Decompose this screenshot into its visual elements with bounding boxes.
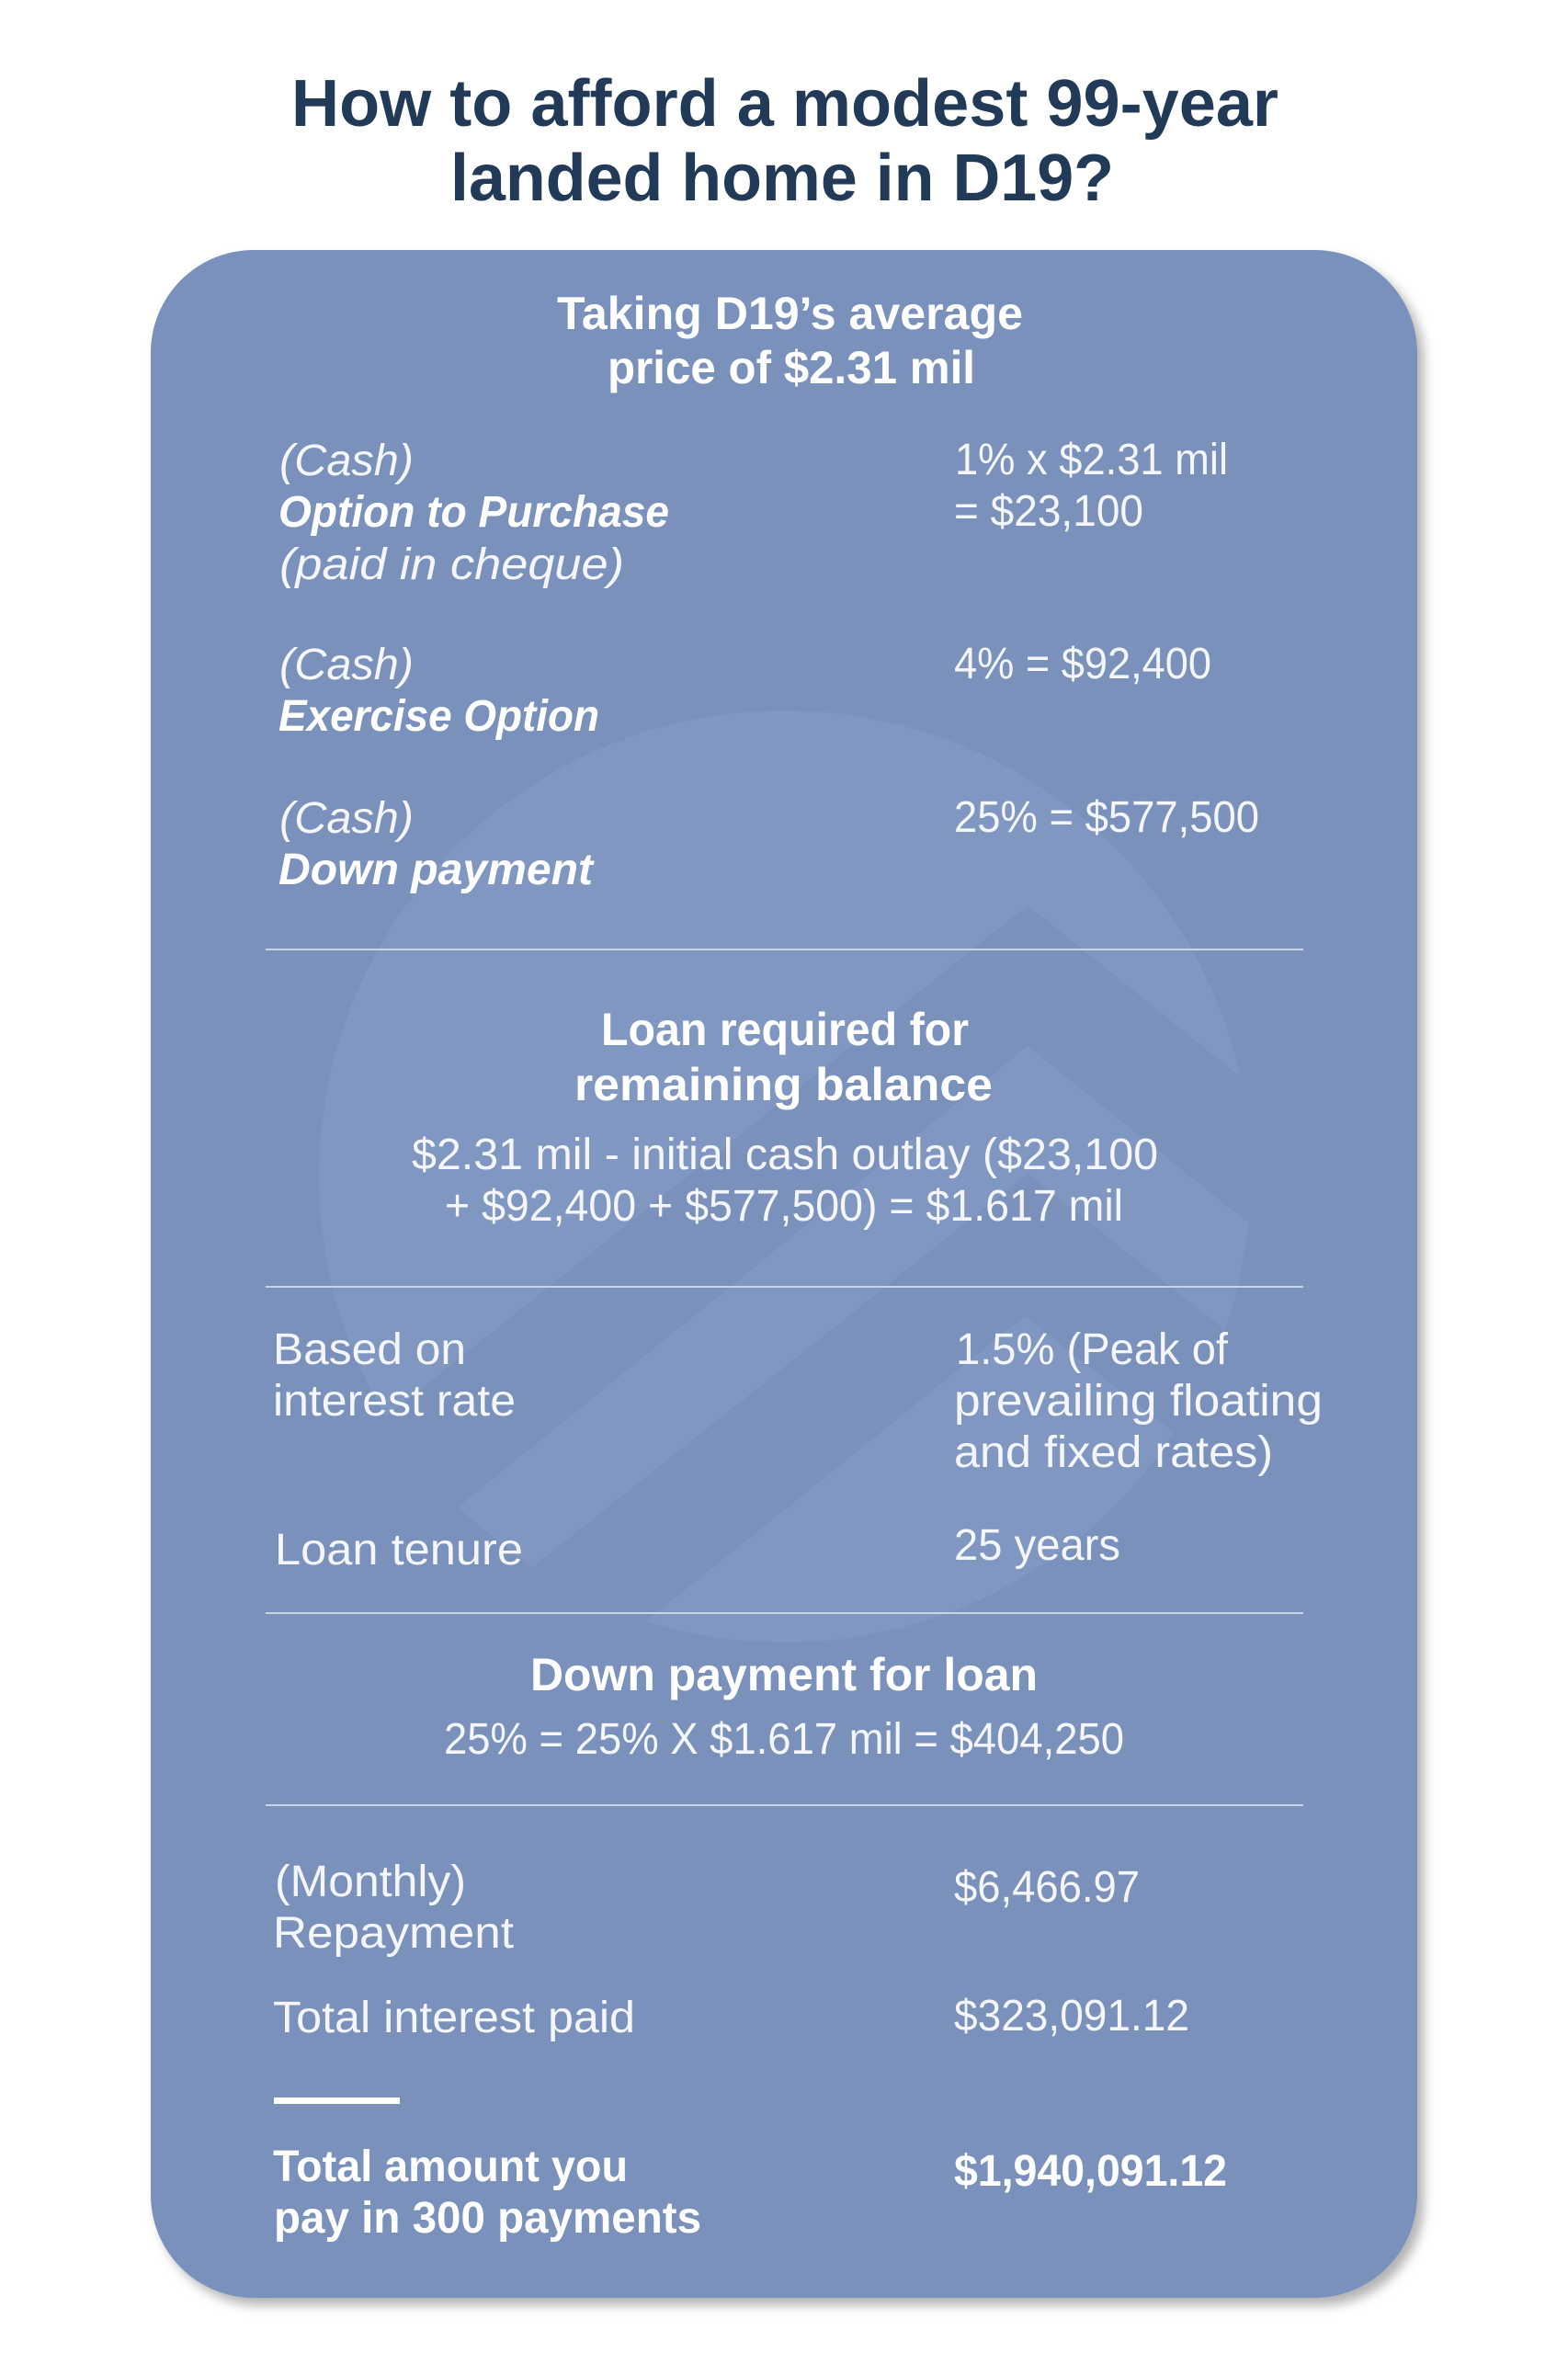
row: total interest paid: $323,091.12 xyxy=(954,1992,1189,2040)
row: down payment: Down payment xyxy=(278,846,595,894)
section: down payment for loan xyxy=(444,1649,1124,1764)
row: interest rate xyxy=(273,1325,1323,1477)
heading: average price: price of $2.31 mil xyxy=(608,342,975,393)
row: option to purchase: Option to Purchase xyxy=(278,488,669,537)
row: option to purchase xyxy=(278,436,1228,589)
row: total interest paid: Total interest paid xyxy=(273,1994,635,2042)
row: exercise option xyxy=(278,640,1211,741)
section: loan required xyxy=(412,1004,1158,1231)
row: exercise option: Exercise Option xyxy=(278,692,599,741)
row: loan tenure: 25 years xyxy=(954,1521,1120,1570)
section: loan required: $2.31 mil - initial cash outlay ($23,100 xyxy=(412,1131,1158,1179)
row: monthly repayment: $6,466.97 xyxy=(954,1863,1140,1912)
row: option to purchase: (paid in cheque) xyxy=(279,540,624,589)
row: exercise option: 4% = $92,400 xyxy=(954,640,1211,688)
row: interest rate: Based on xyxy=(273,1325,466,1374)
row: down payment xyxy=(278,793,1259,894)
row: total amount: Total amount you xyxy=(273,2143,628,2191)
heading: average price xyxy=(557,288,1023,393)
section: loan required: remaining balance xyxy=(574,1059,993,1110)
row: loan tenure xyxy=(275,1521,1120,1574)
row: interest rate: interest rate xyxy=(273,1377,516,1426)
row: interest rate: prevailing floating xyxy=(954,1377,1323,1426)
row: down payment: (Cash) xyxy=(279,794,414,843)
heading: average price: Taking D19’s average xyxy=(557,288,1023,339)
row: exercise option: (Cash) xyxy=(279,641,414,689)
title: landed home in D19? xyxy=(450,142,1114,215)
row: option to purchase: = $23,100 xyxy=(954,487,1143,536)
icon: house logo watermark xyxy=(276,643,1287,1746)
section: loan required: + $92,400 + $577,500) = $1.617 mil xyxy=(445,1182,1123,1231)
row: total amount xyxy=(273,2143,1227,2243)
row: total interest paid xyxy=(273,1992,1189,2042)
row: down payment: 25% = $577,500 xyxy=(954,793,1259,842)
row: monthly repayment: (Monthly) xyxy=(275,1858,466,1906)
section: loan required: Loan required for xyxy=(601,1004,969,1055)
section: down payment for loan: 25% = 25% X $1.617 mil = $404,250 xyxy=(444,1715,1124,1764)
row: loan tenure: Loan tenure xyxy=(275,1526,523,1574)
row: interest rate: 1.5% (Peak of xyxy=(956,1325,1229,1374)
title xyxy=(291,67,1278,215)
row: option to purchase: 1% x $2.31 mil xyxy=(955,436,1228,484)
row: monthly repayment: Repayment xyxy=(273,1909,514,1958)
title: How to afford a modest 99-year xyxy=(291,67,1278,141)
row: interest rate: and fixed rates) xyxy=(954,1428,1273,1477)
row: total amount: $1,940,091.12 xyxy=(954,2147,1227,2196)
panel: cost breakdown xyxy=(151,250,1417,2298)
row: total amount: pay in 300 payments xyxy=(274,2194,701,2243)
row: option to purchase: (Cash) xyxy=(279,437,414,485)
section: down payment for loan: Down payment for loan xyxy=(530,1649,1038,1700)
row: monthly repayment xyxy=(273,1858,1140,1958)
